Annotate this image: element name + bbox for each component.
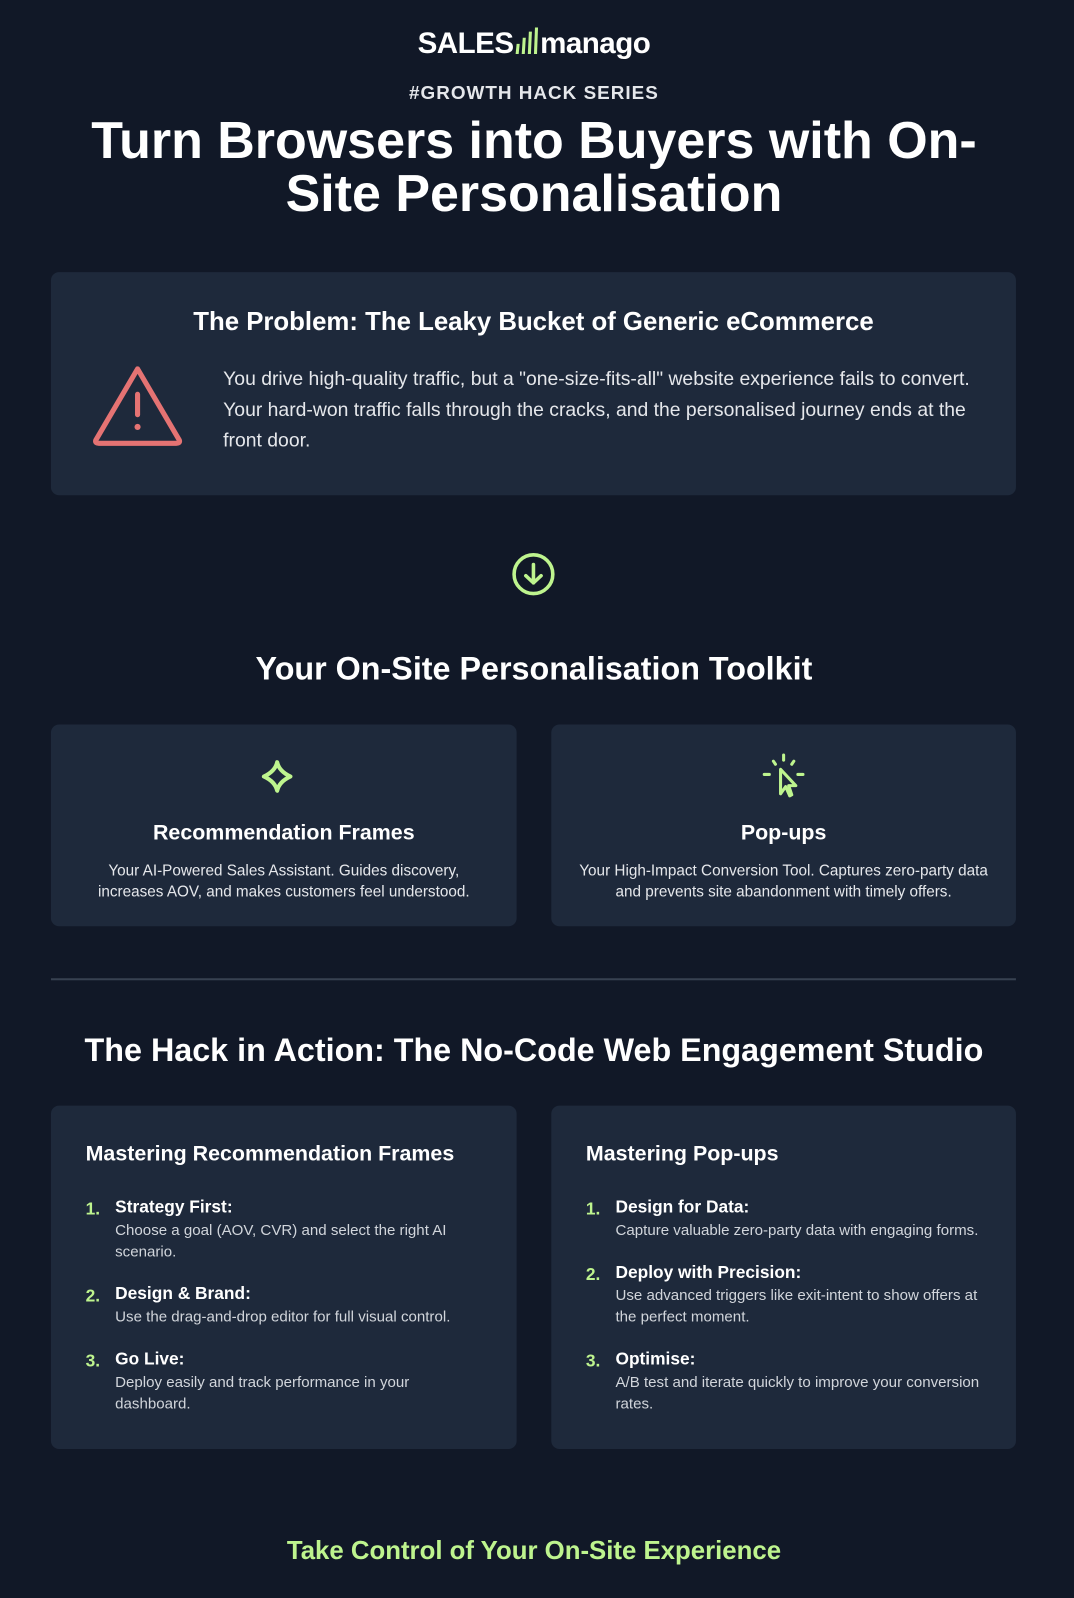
step 3 <box>86 1349 410 1412</box>
arrow: down <box>512 553 555 596</box>
heading: Mastering Pop-ups <box>586 1142 779 1166</box>
step 1: Choose a goal (AOV, CVR) and select the right AI scenario. <box>115 1223 446 1261</box>
panel: pop-ups <box>551 725 1016 926</box>
title: Turn Browsers into Buyers with On-Site Personalisation <box>91 111 977 222</box>
title: Pop-ups <box>741 821 826 845</box>
step 3 <box>586 1349 979 1412</box>
icon: sparkle <box>262 760 292 793</box>
problem heading: The Problem: The Leaky Bucket of Generic eCommerce <box>193 308 874 336</box>
desc: Your High-Impact Conversion Tool. Captures zero-party data and prevents site abandonment with timely offers. <box>579 862 988 901</box>
step 2: Deploy with Precision: <box>615 1263 801 1282</box>
step 3: A/B test and iterate quickly to improve your conversion rates. <box>615 1375 979 1412</box>
step 1: 1. <box>86 1199 100 1219</box>
panel: recommendation frames <box>51 725 517 926</box>
problem text: You drive high-quality traffic, but a "one-size-fits-all" website experience fails to convert. Your hard-won traffic falls through the cracks, and the personalised journey ends at the front door. <box>223 369 970 451</box>
step 3: Optimise: <box>615 1349 695 1369</box>
title: Recommendation Frames <box>153 821 415 845</box>
panel: mastering recommendation frames <box>51 1106 517 1449</box>
logo: SALES manago <box>418 28 650 60</box>
step 2 <box>86 1284 450 1326</box>
step 1: 1. <box>586 1199 600 1219</box>
footer cta: Take Control of Your On-Site Experience <box>287 1537 781 1565</box>
step 1: Design for Data: <box>615 1197 749 1217</box>
step 2: Design & Brand: <box>115 1284 251 1303</box>
step 2: 2. <box>86 1286 100 1305</box>
toolkit heading: Your On-Site Personalisation Toolkit <box>256 650 812 687</box>
step 3: Go Live: <box>115 1349 184 1369</box>
series label: #GROWTH HACK SERIES <box>409 82 659 103</box>
step 1 <box>86 1197 446 1261</box>
step 1 <box>586 1197 978 1239</box>
heading: Mastering Recommendation Frames <box>86 1142 454 1166</box>
icon: warning <box>93 366 182 446</box>
step 1: Strategy First: <box>115 1197 233 1217</box>
step 2: Use the drag-and-drop editor for full visual control. <box>115 1309 450 1326</box>
icon: click <box>762 754 804 798</box>
hack heading: The Hack in Action: The No-Code Web Engagement Studio <box>85 1031 983 1068</box>
step 2: Use advanced triggers like exit-intent to show offers at the perfect moment. <box>615 1288 977 1326</box>
step 3: 3. <box>586 1351 600 1371</box>
step 3: Deploy easily and track performance in your dashboard. <box>115 1375 409 1412</box>
step 2 <box>586 1263 978 1326</box>
panel: problem <box>51 272 1016 495</box>
desc: Your AI-Powered Sales Assistant. Guides discovery, increases AOV, and makes customers feel understood. <box>98 862 470 901</box>
panel: mastering pop-ups <box>551 1106 1016 1449</box>
step 1: Capture valuable zero-party data with engaging forms. <box>615 1223 978 1239</box>
step 2: 2. <box>586 1265 600 1284</box>
step 3: 3. <box>86 1351 100 1371</box>
